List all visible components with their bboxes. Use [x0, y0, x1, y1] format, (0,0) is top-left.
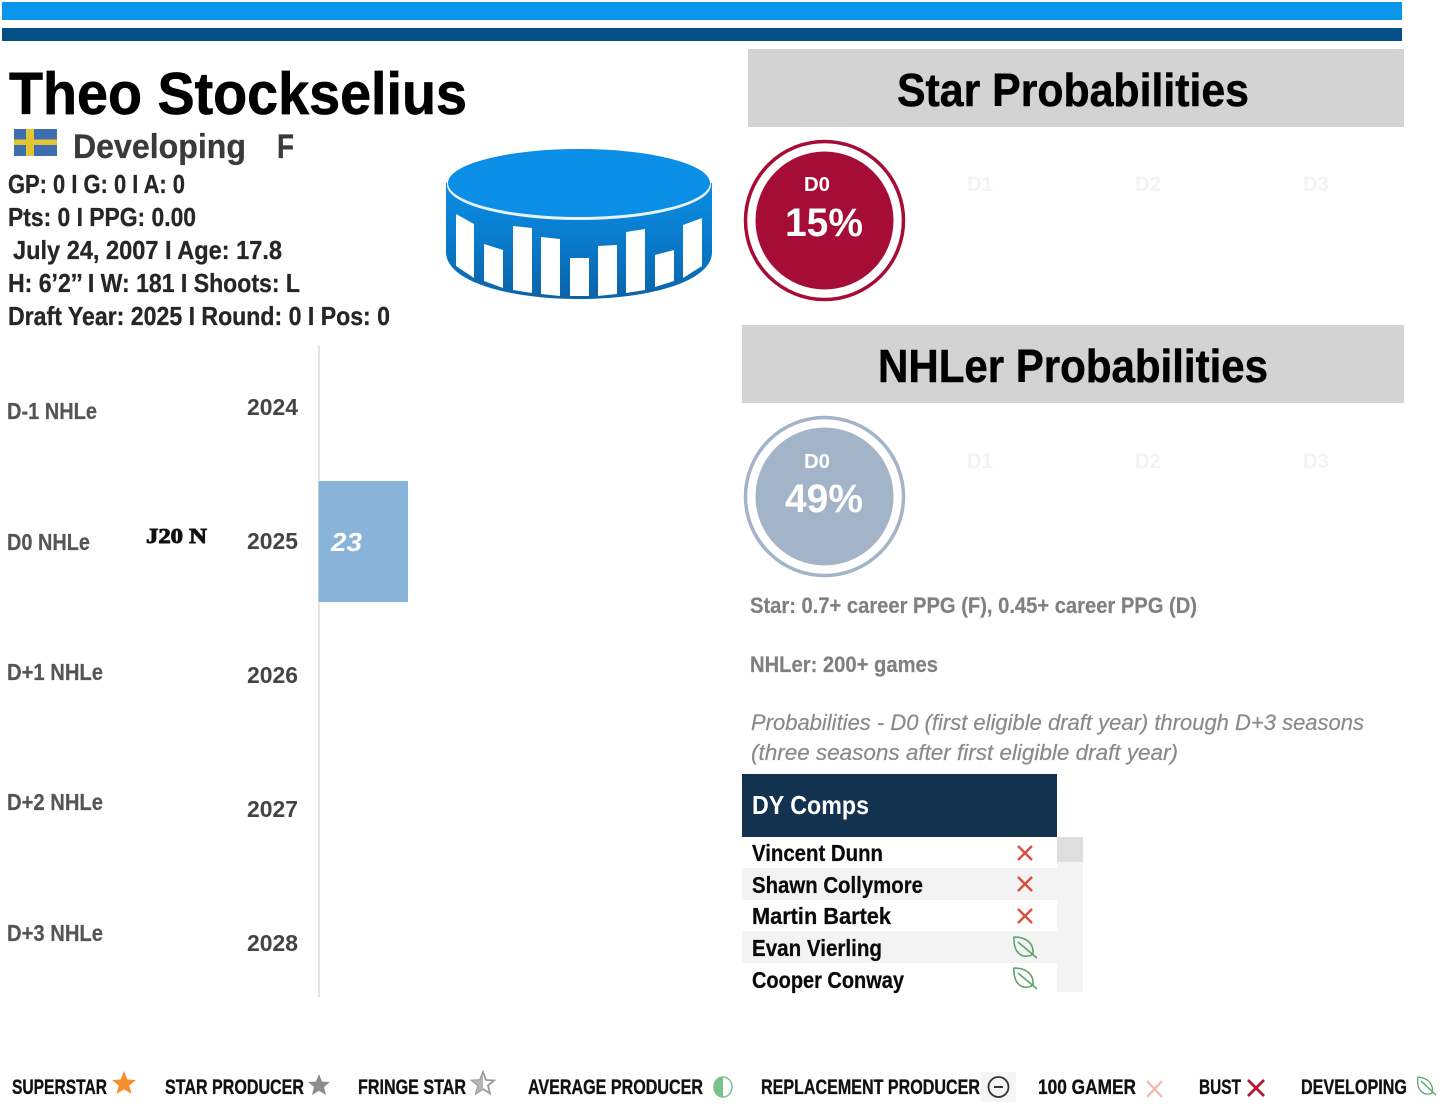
faded label: D3: D3 — [1303, 450, 1329, 473]
probability circle: D0 NHLer 49%: D0 — [804, 451, 830, 473]
title: player name: Theo Stockselius — [9, 61, 467, 127]
legend: player outcome categories — [12, 1071, 1436, 1102]
icon: hockey puck logo — [446, 149, 712, 299]
definition: NHLer: NHLer: 200+ games — [750, 652, 938, 677]
row: Cooper Conway — [752, 967, 1037, 993]
panel: Star probabilities — [746, 49, 1404, 300]
heading: Star Probabilities — [748, 49, 1404, 127]
faded label: D1: D1 — [967, 450, 993, 473]
probability circle: D0 star 15%: D0 — [804, 174, 830, 196]
chart: NHLe by season — [7, 346, 408, 997]
probability circle: D0 star 15% — [746, 142, 904, 300]
faded label: D2: D2 — [1135, 173, 1161, 196]
icon: Swedish flag — [14, 129, 57, 156]
legend item: Fringe Star: FRINGE STAR — [358, 1076, 466, 1099]
row: Vincent Dunn — [752, 840, 1032, 866]
year: 2026: 2026 — [247, 662, 298, 688]
probability circle: D0 NHLer 49%: 49% — [785, 477, 863, 521]
heading: Star Probabilities: Star Probabilities — [897, 64, 1249, 116]
faded label: D2: D2 — [1135, 450, 1161, 473]
row label: D+1 NHLe: D+1 NHLe — [7, 659, 103, 685]
heading: NHLer Probabilities: NHLer Probabilities — [878, 340, 1268, 392]
row label: D+3 NHLe: D+3 NHLe — [7, 920, 103, 946]
row label: D+2 NHLe: D+2 NHLe — [7, 789, 103, 815]
row: Martin Bartek — [752, 903, 1032, 929]
panel: NHLer probabilities — [742, 325, 1404, 576]
table: DY Comps — [742, 774, 1083, 993]
row label: D0 NHLe: D0 NHLe — [7, 529, 90, 555]
year: 2024: 2024 — [247, 394, 298, 420]
league label: J20 N: J20 N — [146, 524, 207, 548]
legend item: 100 Gamer: 100 GAMER — [1038, 1076, 1136, 1099]
year: 2028: 2028 — [247, 930, 298, 956]
bar: 2025 NHLe 23: 23 — [330, 527, 363, 557]
note: probabilities explanation — [751, 710, 1364, 765]
table header — [742, 774, 1057, 837]
text block: definitions — [750, 593, 1364, 765]
faded label: D3: D3 — [1303, 173, 1329, 196]
row label: D-1 NHLe: D-1 NHLe — [7, 398, 97, 424]
birth date and age: July 24, 2007 I Age: 17.8 — [13, 235, 282, 265]
stats: points: Pts: 0 I PPG: 0.00 — [8, 202, 196, 232]
row: Shawn Collymore — [752, 872, 1032, 898]
bar: 2025 NHLe 23 — [318, 481, 408, 602]
row: Martin Bartek: Martin Bartek — [752, 903, 891, 929]
legend item: Developing: DEVELOPING — [1301, 1076, 1407, 1099]
stats: games, goals, assists: GP: 0 I G: 0 I A: 0 — [8, 169, 185, 199]
row: Evan Vierling — [752, 935, 1037, 961]
player position: F — [277, 128, 294, 166]
note: probabilities explanation: (three seasons after first eligible draft year) — [751, 740, 1178, 765]
legend item: Replacement Producer: REPLACEMENT PRODUCER — [761, 1076, 980, 1099]
legend item: Bust: BUST — [1199, 1076, 1241, 1099]
scrollbar — [1057, 837, 1083, 992]
player status: Developing — [73, 128, 246, 166]
height, weight, shoots: H: 6’2’’ I W: 181 I Shoots: L — [8, 268, 300, 298]
probability circle: D0 NHLer 49% — [746, 418, 904, 576]
note: probabilities explanation: Probabilities - D0 (first eligible draft year) through D+3 seasons — [751, 710, 1364, 735]
legend item: Superstar: SUPERSTAR — [12, 1076, 107, 1099]
year: 2027: 2027 — [247, 796, 298, 822]
faded label: D1: D1 — [967, 173, 993, 196]
table header: DY Comps — [752, 790, 869, 820]
row: Cooper Conway: Cooper Conway — [752, 967, 904, 993]
header bars — [2, 2, 1402, 41]
panel: player profile — [8, 61, 467, 331]
row: Vincent Dunn: Vincent Dunn — [752, 840, 883, 866]
row: Evan Vierling: Evan Vierling — [752, 935, 882, 961]
heading: NHLer Probabilities — [742, 325, 1404, 403]
definition: Star: Star: 0.7+ career PPG (F), 0.45+ career PPG (D) — [750, 593, 1197, 618]
legend item: Star Producer: STAR PRODUCER — [165, 1076, 304, 1099]
probability circle: D0 star 15%: 15% — [785, 201, 863, 245]
row: Shawn Collymore: Shawn Collymore — [752, 872, 923, 898]
legend item: Average Producer: AVERAGE PRODUCER — [528, 1076, 703, 1099]
year: 2025: 2025 — [247, 528, 298, 554]
draft details: Draft Year: 2025 I Round: 0 I Pos: 0 — [8, 301, 390, 331]
